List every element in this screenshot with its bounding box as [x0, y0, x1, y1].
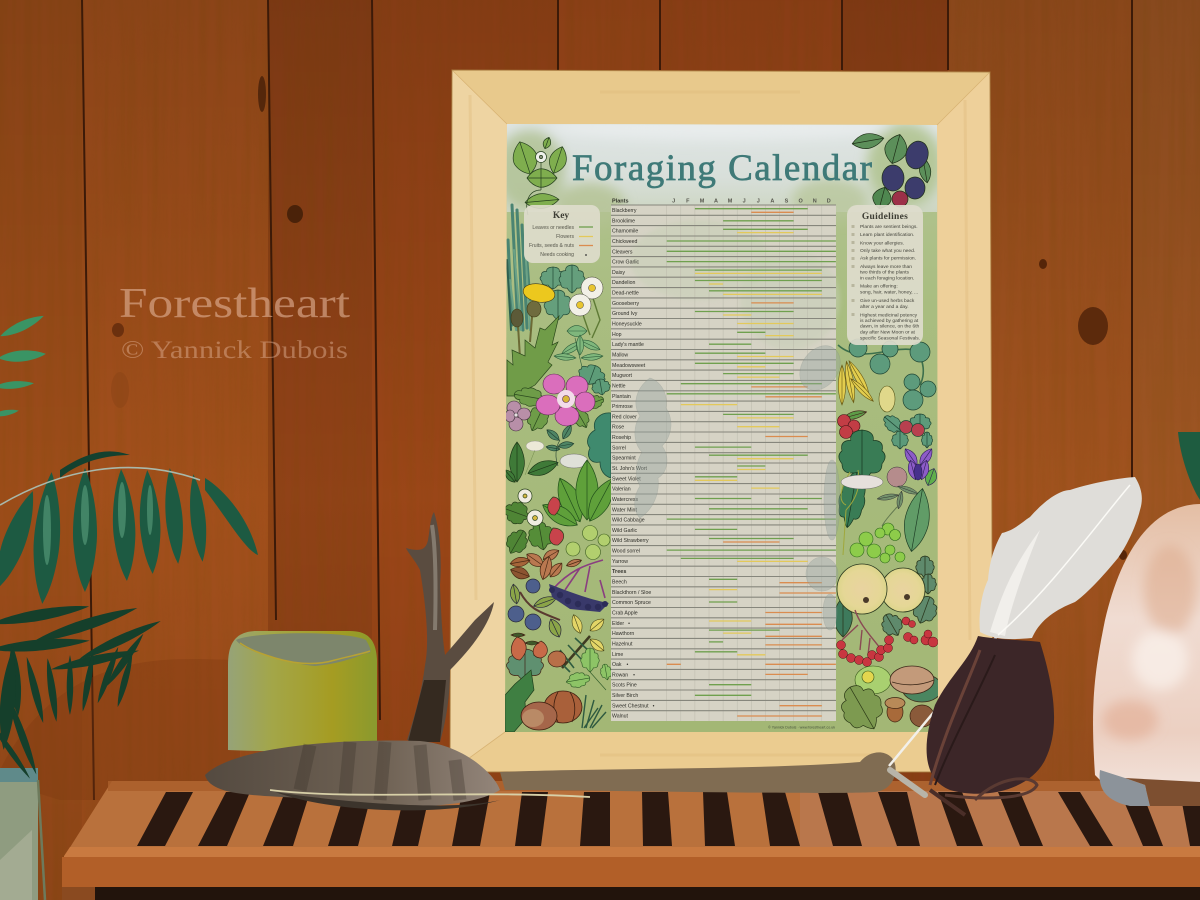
row: Daisy: Daisy: [612, 270, 625, 276]
row: St. John's Wort: St. John's Wort: [612, 466, 647, 472]
hawk feather: [205, 741, 590, 810]
row: Oak: Oak •: [612, 662, 629, 668]
row: Crab Apple: Crab Apple: [612, 610, 638, 616]
plant: chestnuts: [521, 691, 582, 730]
plant: elderberries: [549, 560, 609, 612]
wooden frame: [450, 70, 993, 772]
row: Sweet Violet: Sweet Violet: [612, 476, 641, 482]
row: Silver Birch: [612, 693, 751, 699]
row: Wild Cabbage: Wild Cabbage: [612, 518, 645, 524]
table header: months: D: [827, 198, 831, 204]
side table: [62, 781, 1200, 900]
plant pot: [0, 768, 45, 900]
row: Wild Garlic: [612, 528, 737, 534]
row: Meadowsweet: Meadowsweet: [612, 363, 646, 369]
guidelines text: is achieved by gathering at: [860, 318, 919, 324]
guidelines heading: Guidelines: [862, 212, 908, 222]
row: Dandelion: Dandelion: [612, 280, 635, 286]
plant: sorrel leaf: [900, 486, 934, 554]
table header: months: A: [714, 198, 718, 204]
plant: teal sorrel: [588, 413, 611, 478]
table header: months: M: [728, 198, 733, 204]
table header: months: F: [686, 198, 690, 204]
plant: red clover: [877, 467, 919, 526]
guidelines text: in each foraging location.: [860, 275, 914, 281]
guidelines text: Plants are sentient beings.: [860, 224, 918, 230]
plant: wood sorrel clovers: [850, 523, 905, 563]
plant: brown acorn: [910, 705, 934, 727]
key panel: [524, 205, 600, 263]
row: Cleavers: Cleavers: [612, 249, 633, 255]
plant: wild strawberry: [506, 488, 564, 554]
leaflet highlights: [43, 482, 153, 565]
candle: [228, 631, 377, 751]
guidelines bullets: [852, 225, 854, 316]
guidelines text: [860, 224, 920, 342]
row: Primrose: Primrose: [612, 404, 633, 410]
plant: pink dog rose: [536, 374, 595, 426]
guidelines text: Only take what you need.: [860, 248, 915, 254]
plant: teal ground ivy leaves: [578, 364, 610, 396]
plant: lady's mantle: [554, 325, 603, 367]
plant: dandelion leaf: [507, 316, 559, 396]
row: Crow Garlic: Crow Garlic: [612, 260, 639, 266]
watermark: copyright: © Yannick Dubois: [121, 337, 348, 364]
plant: lime flower and leaf: [855, 666, 891, 694]
plant: mallow flower: [505, 401, 530, 431]
watermark: Forestheart: Forestheart: [119, 281, 350, 327]
row: Mugwort: Mugwort: [612, 373, 632, 379]
plant: hazelnut cluster: [510, 549, 582, 580]
plant: valerian umbel: [560, 454, 588, 468]
plant: cleavers and chickweed top left: [512, 137, 567, 215]
row: Hawthorn: Hawthorn: [612, 631, 634, 637]
guidelines text: Always leave more than: [860, 264, 912, 270]
plant: hop flowers: [566, 526, 610, 560]
poster: [495, 116, 943, 739]
row: Scots Pine: Scots Pine: [612, 683, 637, 689]
plant: plantain dark leaves: [506, 442, 558, 482]
table header: months: S: [785, 198, 789, 204]
row: Sorrel: [612, 445, 751, 451]
row: Blackberry: Blackberry: [612, 208, 637, 214]
row: Rose: Rose: [612, 425, 624, 431]
row: Dead-nettle: Dead-nettle: [612, 291, 639, 297]
row: Trees heading: Trees: [612, 569, 626, 575]
plant: daisies: [569, 277, 603, 338]
row: Wild Strawberry: Wild Strawberry: [612, 538, 649, 544]
green leaf top right: [1178, 432, 1200, 500]
plant: sweet chestnut leaf: [505, 670, 534, 732]
plant: spearmint sprig: [544, 423, 574, 466]
row: Brooklime: Brooklime: [612, 218, 635, 224]
guidelines text: after a year and a day.: [860, 304, 909, 310]
row: Chamomile: Chamomile: [612, 229, 638, 235]
plant: hop cone: [879, 386, 895, 412]
row: Plantain: Plantain: [612, 394, 631, 400]
row: Lady's mantle: Lady's mantle: [612, 342, 644, 348]
plant: right-hand round vine leaves: [838, 339, 936, 410]
plant: spruce and yellow catkins: [560, 613, 607, 672]
main frond leaflets: [0, 451, 258, 605]
plant: blackthorn sloes: [508, 579, 564, 639]
copyright line: © Yannick Dubois · www.forestheart.co.uk: [768, 726, 835, 730]
guidelines text: Highest medicinal potency: [860, 312, 918, 318]
key: flowers: Flowers: [556, 234, 574, 240]
guidelines text: song, hair, water, honey, ...: [860, 289, 918, 295]
table header: months: O: [798, 198, 803, 204]
row: Primrose: [612, 404, 737, 410]
plant: blackberries top right: [851, 131, 933, 211]
plant: crab apples and leaves: [834, 556, 941, 640]
guidelines text: Learn plant identification.: [860, 232, 914, 238]
lower dark fronds: [0, 601, 163, 780]
guidelines text: specific Seasonal Festivals.: [860, 336, 920, 342]
row: Hop: Hop: [612, 332, 622, 338]
row: Sweet Violet: [612, 476, 737, 482]
key: needs cooking: Needs cooking: [540, 252, 574, 258]
row: Mallow: Mallow: [612, 352, 628, 358]
plant: dark hawthorn and yarrow leaves: [834, 430, 885, 555]
row: Ground Ivy: Ground Ivy: [612, 311, 638, 317]
table slat gaps: [137, 792, 1200, 846]
guidelines panel: [847, 205, 923, 345]
row: Walnut: Walnut: [612, 714, 629, 720]
plant: pine needles: [582, 695, 606, 728]
salt lamp: [1093, 504, 1200, 806]
row: Elder: Elder •: [612, 621, 630, 627]
leather pouch: [927, 636, 1054, 815]
plant: valerian white umbel: [841, 475, 883, 489]
row: Scots Pine: [612, 683, 751, 689]
row: Watercress: Watercress: [612, 497, 638, 503]
row: Rowan: Rowan •: [612, 672, 635, 678]
title: Foraging Calendar: [572, 148, 872, 189]
row: Gooseberry: Gooseberry: [612, 301, 640, 307]
plant: red berries: [838, 408, 868, 438]
row: Sorrel: Sorrel: [612, 445, 626, 451]
key: leaves or needles: Leaves or needles: [532, 225, 574, 231]
guidelines text: Make an offering:: [860, 284, 898, 290]
table header: months: J: [757, 198, 760, 204]
calendar table: [611, 198, 840, 721]
row: Hazelnut: Hazelnut: [612, 641, 633, 647]
guidelines text: Give un-used herbs back: [860, 298, 915, 304]
row: Honeysuckle: Honeysuckle: [612, 322, 642, 328]
plant: rowan berries: [836, 610, 894, 666]
guidelines text: dawn, in silence, on the 6th: [860, 324, 920, 330]
guidelines text: day after New Moon or at: [860, 330, 916, 336]
row: Wild Garlic: Wild Garlic: [612, 528, 637, 534]
row: Lime: Lime: [612, 652, 623, 658]
antler: [406, 512, 494, 742]
table header: plants: Plants: [612, 198, 629, 204]
row: Common Spruce: Common Spruce: [612, 600, 651, 606]
key: fruits, seeds and nuts: Fruits, seeds & nuts: [529, 243, 574, 249]
table header: months: J: [743, 198, 746, 204]
plant: wild garlic grass blades: [507, 205, 530, 330]
plant: bright broad leaves: [542, 460, 611, 526]
row: Water Mint: Water Mint: [612, 507, 637, 513]
guidelines text: Know your allergies.: [860, 240, 904, 246]
table header: months: M: [700, 198, 705, 204]
plant: dandelion flower and bud: [511, 281, 556, 358]
row: Valerian: Valerian: [612, 487, 631, 493]
plant: rose leaves: [514, 388, 604, 431]
row: Sweet Chestnut: Sweet Chestnut •: [612, 703, 655, 709]
row: Wood sorrel: Wood sorrel: [612, 549, 640, 555]
plant: hawthorn berries: [902, 617, 938, 647]
row: Chickweed: Chickweed: [612, 239, 637, 245]
row: Nettle: Nettle: [612, 383, 626, 389]
table header: months: N: [813, 198, 817, 204]
white feather: [980, 477, 1142, 639]
poster background: [495, 116, 943, 734]
guidelines text: Ask plants for permission.: [860, 256, 916, 262]
row: Red clover: Red clover: [612, 414, 637, 420]
ghost leaves over table: [635, 338, 849, 630]
upper left small frond: [0, 312, 46, 418]
plant: strawberry and hazel: [506, 633, 566, 681]
table background: [611, 205, 840, 721]
row: Blackthorn / Sloe: Blackthorn / Sloe: [612, 590, 651, 596]
row: Common Spruce: [612, 600, 737, 606]
plant: teal mallow leaves: [540, 265, 585, 320]
row: Beech: Beech: [612, 580, 627, 586]
guidelines text: two thirds of the plants: [860, 270, 909, 276]
row: Yarrow: Yarrow: [612, 559, 628, 565]
row: Rosehip: Rosehip: [612, 435, 631, 441]
plant: silver birch leaves: [565, 648, 613, 690]
plant: sweet violet: [904, 448, 937, 486]
plant: gooseberries: [880, 411, 933, 449]
plant: oak leaf: [832, 677, 892, 739]
plant: walnut: [890, 666, 942, 702]
quill of white feather: [889, 635, 998, 766]
table header: months: [672, 198, 831, 204]
row: Silver Birch: Silver Birch: [612, 693, 638, 699]
table header: months: A: [770, 198, 774, 204]
plant: primrose white umbel: [525, 441, 544, 475]
key heading: Key: [553, 211, 569, 221]
table header: months: J: [672, 198, 675, 204]
row: Spearmint: Spearmint: [612, 456, 636, 462]
row: Lady's mantle: [612, 342, 751, 348]
palm plant: [0, 312, 258, 780]
plant: acorn: [885, 698, 905, 722]
driftwood stick: [500, 752, 925, 795]
plant: honeysuckle: [838, 359, 876, 405]
